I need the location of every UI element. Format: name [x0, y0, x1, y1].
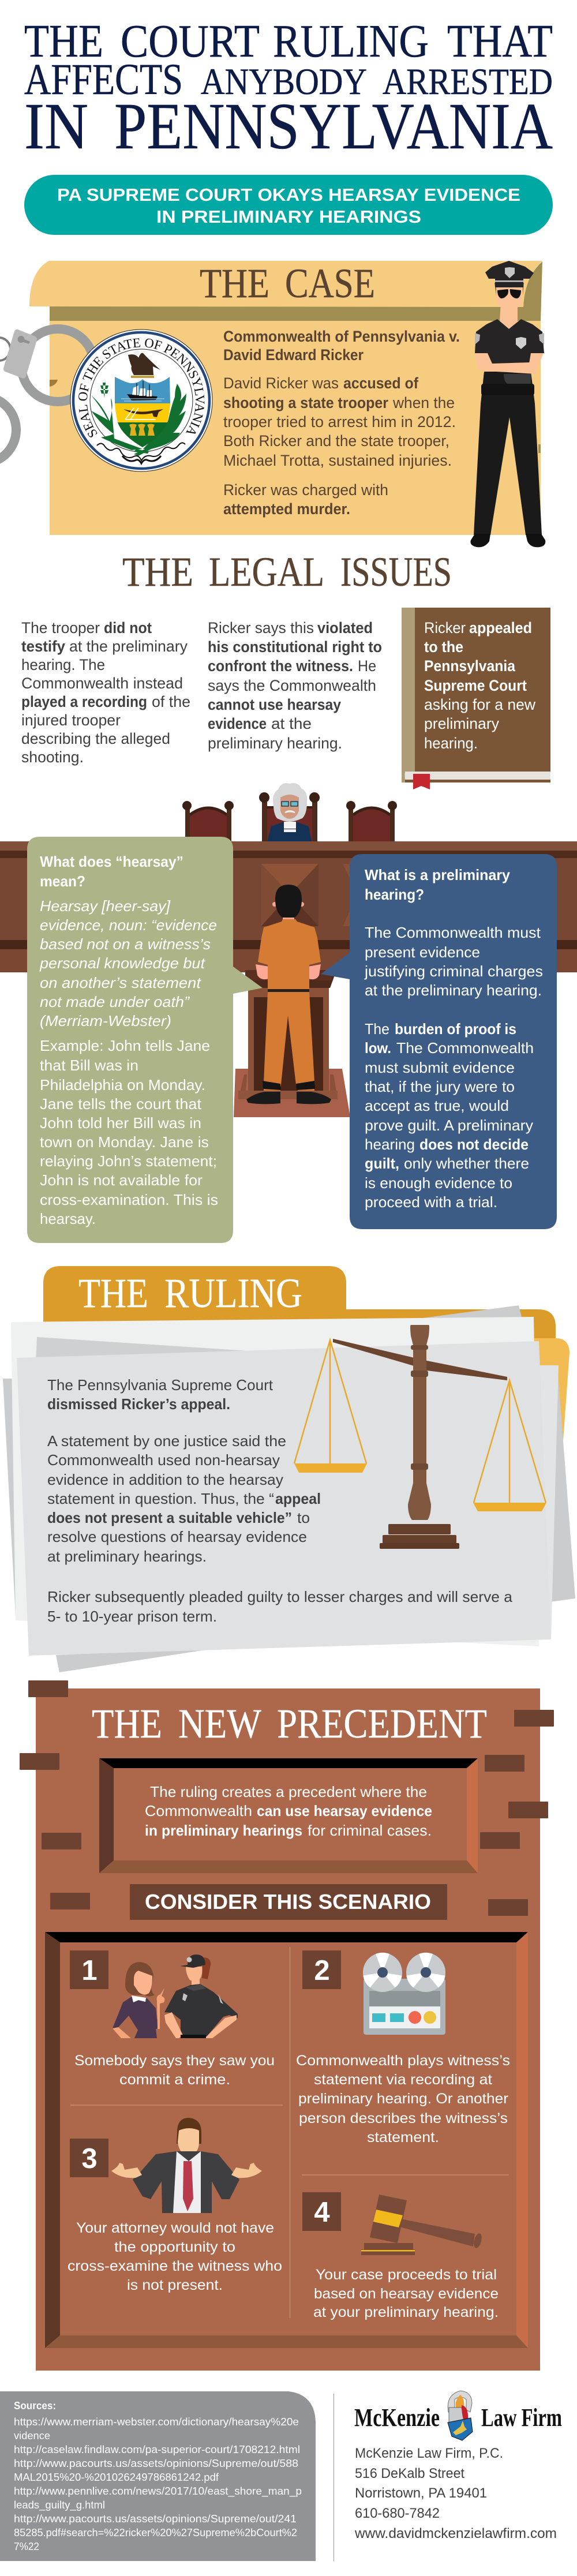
text column: Ricker's claim: cannot use hearsay	[208, 696, 341, 713]
panel: sources: https://www.merriam-webster.com/dictionary/hearsay%20e	[14, 2416, 299, 2428]
heading: the new precedent: THE	[92, 1701, 162, 1747]
text: step 4: based on hearsay evidence	[314, 2286, 499, 2302]
sunglasses	[497, 289, 521, 298]
text: case description: David Edward Ricker	[223, 346, 364, 364]
sheaves	[129, 424, 155, 436]
callout: what does hearsay mean: not made under oath”	[40, 993, 190, 1010]
ornamental scroll	[97, 443, 185, 463]
text column: Ricker's claim: Ricker says this	[208, 619, 314, 636]
heading: the new precedent: PRECEDENT	[277, 1701, 487, 1747]
heading: the case: CASE	[285, 260, 375, 306]
text: case description: attempted murder.	[223, 500, 350, 518]
ears	[272, 902, 277, 907]
callout: what is a preliminary hearing: only whether there	[404, 1155, 529, 1172]
text: step 3: the opportunity to	[114, 2239, 235, 2255]
banner: consider this scenario: CONSIDER THIS SCENARIO	[145, 1890, 431, 1914]
callout: what does hearsay mean: Philadelphia on Monday.	[40, 1076, 205, 1094]
text: step 4: at your preliminary hearing.	[313, 2304, 499, 2320]
logo: McKenzie Law Firm	[354, 2391, 562, 2440]
title: THAT	[447, 15, 553, 67]
text: case description: Ricker was charged with	[223, 481, 388, 499]
shirt	[475, 319, 544, 364]
text: ruling: statement in question. Thus, the “	[47, 1490, 274, 1507]
head and neck	[496, 287, 523, 330]
panel: sources: MAL2015%20-%201026249786861242.pdf	[14, 2472, 219, 2483]
callout: what does hearsay mean: What does “hearsay”	[40, 853, 183, 870]
main sheet	[17, 1341, 551, 1656]
text: appeal: Ricker	[424, 619, 466, 636]
panel: sources: leads_guilty_g.html	[14, 2499, 105, 2511]
text: step 1: Somebody says they saw you	[74, 2053, 275, 2069]
panel: the case	[29, 260, 542, 535]
text: firm contact details	[354, 2446, 557, 2541]
step 2: 2	[314, 1955, 330, 1986]
panel: sources	[0, 2391, 316, 2561]
callout: what is a preliminary hearing: The	[365, 1020, 389, 1038]
panel: the ruling	[3, 1266, 575, 1672]
callout: what does hearsay mean: Jane tells the court that	[40, 1095, 202, 1113]
police cap	[485, 261, 534, 287]
callout: what is a preliminary hearing: present evidence	[365, 943, 480, 961]
callout: what does hearsay mean: Hearsay [heer-say]	[40, 897, 171, 915]
inset: precedent statement: for criminal cases.	[308, 1822, 432, 1839]
mid gray sheet	[36, 1337, 257, 1363]
text: case description: shooting a state trooper	[223, 394, 388, 411]
text: step 1: commit a crime.	[119, 2072, 230, 2088]
beam	[333, 1339, 507, 1380]
callout: what is a preliminary hearing: is enough evidence to	[365, 1174, 512, 1192]
text: appeal: asking for a new	[424, 696, 535, 713]
ship	[121, 381, 164, 401]
callout: what does hearsay mean: personal knowledge but	[39, 954, 206, 972]
callout: what does hearsay mean: based not on a witness’s	[40, 935, 211, 953]
text column: Ricker's claim: his constitutional right to	[208, 638, 382, 656]
text column: trooper did not testify: hearing. The	[21, 656, 105, 673]
trousers	[474, 372, 542, 535]
title	[24, 15, 553, 163]
callout: what does hearsay mean: John told her Bill was in	[40, 1114, 201, 1132]
text: ruling: does not present a suitable vehicle”	[47, 1509, 292, 1526]
callout: what is a preliminary hearing: The Commonwealth must	[365, 924, 541, 941]
text column: Ricker's claim: He	[358, 657, 376, 675]
callout: what is a preliminary hearing: hearing?	[365, 886, 424, 903]
callout: what is a preliminary hearing	[321, 854, 557, 1229]
text: appeal: Pennsylvania	[424, 657, 516, 675]
crossed arms	[475, 353, 544, 374]
head	[275, 885, 302, 918]
inset: scenario frame	[45, 1932, 528, 2348]
text column: trooper did not testify: shooting.	[21, 748, 84, 766]
panel: sources: http://www.pacourts.us/assets/opinions/Supreme/out/241	[14, 2513, 297, 2525]
right pan	[473, 1380, 546, 1511]
text: case description: trooper tried to arrest him in 2012.	[223, 413, 456, 430]
text: step 2	[296, 2053, 510, 2146]
text: firm contact details: 516 DeKalb Street	[355, 2466, 464, 2481]
panel: sources: 85285.pdf#search=%22ricker%20%27Supreme%2bCourt%2	[14, 2527, 297, 2538]
text: step 3	[68, 2220, 282, 2293]
callout: what is a preliminary hearing: at the preliminary hearing.	[365, 982, 542, 999]
text column: Ricker's claim: confront the witness.	[208, 657, 353, 675]
chair right	[346, 801, 397, 841]
text: ruling: resolve questions of hearsay evidence	[47, 1528, 307, 1545]
text column: trooper did not testify: of the	[152, 693, 190, 710]
eagle	[128, 350, 160, 378]
text: case description: accused of	[343, 375, 419, 392]
text: step 2: Commonwealth plays witness’s	[296, 2053, 510, 2069]
panel: sources: http://www.pacourts.us/assets/opinions/Supreme/out/588	[14, 2458, 298, 2469]
left wreath	[91, 383, 149, 454]
step 4: 4	[314, 2197, 330, 2228]
callout: what is a preliminary hearing: must submit evidence	[365, 1059, 515, 1076]
text: appeal: hearing.	[424, 735, 478, 752]
text column: Ricker's claim: preliminary hearing.	[208, 735, 342, 752]
post	[408, 1325, 431, 1520]
text column: trooper did not testify: Commonwealth instead	[21, 675, 183, 692]
callout: what does hearsay mean: Example: John tells Jane	[40, 1037, 210, 1054]
right wreath	[134, 384, 186, 456]
title: IN	[24, 89, 88, 163]
subtitle banner: IN PRELIMINARY HEARINGS	[156, 207, 421, 227]
chair centre	[259, 792, 320, 841]
text column: trooper did not testify: The trooper	[21, 619, 100, 636]
icon: bookmark	[413, 774, 430, 789]
panel: book with appeal text	[402, 608, 550, 789]
step 2	[296, 1950, 510, 2146]
neck	[283, 915, 294, 922]
logo: McKenzie Law Firm: McKenzie	[354, 2403, 440, 2432]
callout: what does hearsay mean: relaying John’s statement;	[40, 1152, 217, 1170]
callout: what is a preliminary hearing: The Commonwealth	[396, 1039, 534, 1057]
callout: what does hearsay mean: cross-examination. This is	[40, 1191, 218, 1208]
callout: what is a preliminary hearing: burden of proof is	[395, 1020, 516, 1038]
icon: shrugging attorney	[111, 2118, 262, 2213]
heading: the new precedent: NEW	[178, 1701, 261, 1747]
panel: sources: 7%22	[14, 2541, 39, 2552]
title: THE	[24, 15, 103, 67]
shirt	[258, 919, 321, 989]
text: appeal: preliminary	[424, 715, 499, 732]
folder back	[43, 1266, 556, 1350]
defendant	[246, 885, 331, 1104]
text: ruling: at preliminary hearings.	[47, 1548, 207, 1565]
plow	[123, 409, 163, 417]
inset: precedent statement: Commonwealth	[145, 1802, 252, 1819]
text column: trooper did not testify: played a recording	[21, 693, 147, 710]
heading: the legal issues	[122, 549, 452, 595]
step 3: 3	[81, 2143, 98, 2174]
inset: precedent statement: in preliminary hearings	[145, 1822, 302, 1839]
text: step 2: statement via recording at	[314, 2072, 492, 2088]
panel: sources: http://www.pennlive.com/news/2017/10/east_shore_man_p	[14, 2485, 302, 2498]
callout: what is a preliminary hearing: that, if the jury were to	[365, 1078, 515, 1095]
text: appeal: to the	[424, 638, 463, 656]
text: case description: Commonwealth of Pennsylvania v.	[223, 328, 460, 345]
title: AFFECTS	[24, 55, 183, 104]
witness stand	[238, 970, 338, 1099]
left pan	[294, 1340, 367, 1473]
icon: police officer	[470, 261, 545, 547]
text: ruling: dismissed Ricker’s appeal.	[47, 1395, 230, 1413]
inset: precedent statement: The ruling creates a precedent where the	[150, 1783, 427, 1800]
icon: handcuffs	[0, 329, 94, 463]
panel: sources: http://caselaw.findlaw.com/pa-superior-court/1708212.html	[14, 2444, 300, 2455]
heading: the ruling: RULING	[164, 1270, 302, 1316]
callout: what does hearsay mean: John is not available for	[40, 1171, 203, 1189]
callout: what does hearsay mean: (Merriam-Webster)	[40, 1012, 171, 1029]
title: RULING	[273, 15, 429, 67]
icon: state seal of Pennsylvania	[70, 329, 212, 472]
heading: the legal issues: LEGAL	[209, 549, 324, 595]
text: ruling: Ricker subsequently pleaded guilty to lesser charges and will serve a	[47, 1588, 513, 1605]
text: appeal: appealed	[469, 619, 532, 636]
text: ruling: to	[297, 1509, 310, 1526]
icon: gavel	[361, 2195, 483, 2255]
text: appeal	[424, 619, 535, 752]
heading: the ruling	[78, 1270, 302, 1316]
carved panel	[261, 864, 369, 926]
heading: the case: THE	[200, 260, 269, 306]
text: case description	[223, 328, 460, 518]
text column: trooper did not testify: describing the alleged	[21, 730, 170, 747]
title: ARRESTED	[383, 61, 553, 103]
inset: precedent statement: can use hearsay evidence	[257, 1802, 432, 1819]
text: step 3: Your attorney would not have	[76, 2220, 274, 2236]
callout: what is a preliminary hearing: does not decide	[419, 1136, 529, 1153]
callout: what does hearsay mean: hearsay.	[40, 1210, 96, 1227]
panel: sources: Sources:	[14, 2400, 56, 2412]
base	[388, 1524, 451, 1534]
icon: reel-to-reel recorder	[362, 1953, 447, 2035]
panel: sources: vidence	[14, 2430, 50, 2442]
text: case description: Michael Trotta, sustained injuries.	[223, 452, 452, 469]
text column: Ricker's claim	[208, 619, 382, 752]
judge	[267, 783, 312, 841]
subtitle banner: PA SUPREME COURT OKAYS HEARSAY EVIDENCE	[57, 185, 520, 205]
text: ruling: The Pennsylvania Supreme Court	[47, 1376, 273, 1394]
shoes	[246, 1092, 331, 1104]
text: firm contact details: McKenzie Law Firm, P.C.	[355, 2446, 503, 2461]
panel: the new precedent	[20, 1680, 554, 2371]
icon: crest	[448, 2391, 473, 2440]
icon: state seal of Pennsylvania: SEAL OF THE STATE OF PENNSYLVANIA	[78, 338, 204, 437]
text: step 4: Your case proceeds to trial	[316, 2267, 497, 2283]
chair left	[182, 801, 234, 841]
text: ruling: A statement by one justice said the	[47, 1432, 286, 1450]
text: firm contact details: www.davidmckenzielawfirm.com	[354, 2526, 557, 2541]
shoes	[470, 534, 545, 547]
title: ANYBODY	[201, 61, 367, 103]
hands	[256, 964, 321, 979]
heading: the ruling: THE	[78, 1270, 148, 1316]
text: ruling: 5- to 10-year prison term.	[47, 1608, 217, 1625]
floor	[234, 1069, 350, 1117]
text column: Ricker's claim: says the Commonwealth	[208, 677, 376, 694]
text: ruling: evidence in addition to the hearsay	[47, 1471, 283, 1488]
back gray sheets	[423, 1305, 523, 1321]
step 1	[70, 1950, 275, 2088]
text: step 2: person describes the witness’s	[299, 2110, 508, 2126]
callout: what does hearsay mean: evidence, noun: “evidence	[40, 916, 217, 934]
heading: the legal issues: THE	[122, 549, 193, 595]
text column: trooper did not testify	[21, 619, 190, 766]
callout: what does hearsay mean: town on Monday. Jane is	[40, 1133, 209, 1151]
text: case description: when the	[392, 394, 455, 411]
text: ruling: appeal	[275, 1490, 321, 1507]
heading: the legal issues: ISSUES	[340, 549, 452, 595]
folder front	[534, 1338, 569, 1512]
heading: the new precedent	[92, 1701, 487, 1747]
step 4	[302, 2192, 499, 2320]
callout: what is a preliminary hearing: guilt,	[365, 1155, 399, 1172]
hair	[494, 283, 524, 295]
callout: what is a preliminary hearing: What is a preliminary	[365, 866, 511, 883]
text: firm contact details: Norristown, PA 19401	[355, 2485, 487, 2501]
callout: what is a preliminary hearing: justifying criminal charges	[364, 963, 543, 980]
callout: what is a preliminary hearing: low.	[365, 1039, 391, 1057]
illustration: courtroom bench	[0, 783, 577, 1117]
subtitle banner	[24, 175, 553, 235]
text column: trooper did not testify: testify	[21, 638, 65, 655]
text: appeal: Supreme Court	[424, 677, 527, 694]
text column: trooper did not testify: injured trooper	[21, 712, 121, 729]
callout: what does hearsay mean: mean?	[40, 873, 85, 890]
inset: precedent statement	[99, 1758, 478, 1873]
bench front	[0, 841, 577, 851]
callout: what does hearsay mean: that Bill was in	[40, 1057, 138, 1074]
text: step 3: is not present.	[127, 2277, 223, 2293]
text: firm contact details: 610-680-7842	[355, 2506, 440, 2521]
text column: trooper did not testify: at the preliminary	[69, 638, 188, 655]
text column: Ricker's claim: evidence	[208, 715, 267, 732]
callout: what does hearsay mean: on another’s statement	[40, 974, 202, 991]
step 3	[68, 2118, 282, 2293]
text: step 2: statement.	[367, 2129, 439, 2146]
bricks	[20, 1680, 554, 1916]
shield	[115, 377, 170, 403]
callout: what is a preliminary hearing: hearing	[365, 1136, 415, 1153]
text: step 1	[74, 2053, 275, 2088]
step 1: 1	[81, 1955, 98, 1986]
text: case description: Both Ricker and the state trooper,	[223, 432, 449, 450]
white sheet	[11, 1317, 539, 1646]
text column: Ricker's claim: violated	[317, 619, 373, 636]
heading: the case	[200, 260, 375, 306]
callout: what is a preliminary hearing: proceed with a trial.	[365, 1193, 497, 1211]
title: COURT	[121, 15, 260, 67]
belt	[504, 374, 531, 384]
text: ruling: Commonwealth used non-hearsay	[47, 1451, 280, 1469]
callout: what does hearsay mean	[27, 837, 263, 1243]
trousers	[264, 992, 314, 1091]
text: ruling	[47, 1376, 513, 1625]
icon: woman talking to officer	[113, 1955, 238, 2038]
text: step 2: preliminary hearing. Or another	[298, 2091, 508, 2107]
text column: Ricker's claim: at the	[271, 715, 312, 732]
callout: what is a preliminary hearing: prove guilt. A preliminary	[365, 1117, 533, 1134]
banner: consider this scenario	[130, 1884, 447, 1920]
text: step 4	[313, 2267, 499, 2320]
icon: scales of justice	[294, 1325, 546, 1549]
text column: trooper did not testify: did not	[104, 619, 152, 636]
text: case description: David Ricker was	[223, 375, 339, 392]
callout: what is a preliminary hearing: accept as true, would	[365, 1097, 509, 1114]
text: step 3: cross-examine the witness who	[68, 2258, 282, 2274]
